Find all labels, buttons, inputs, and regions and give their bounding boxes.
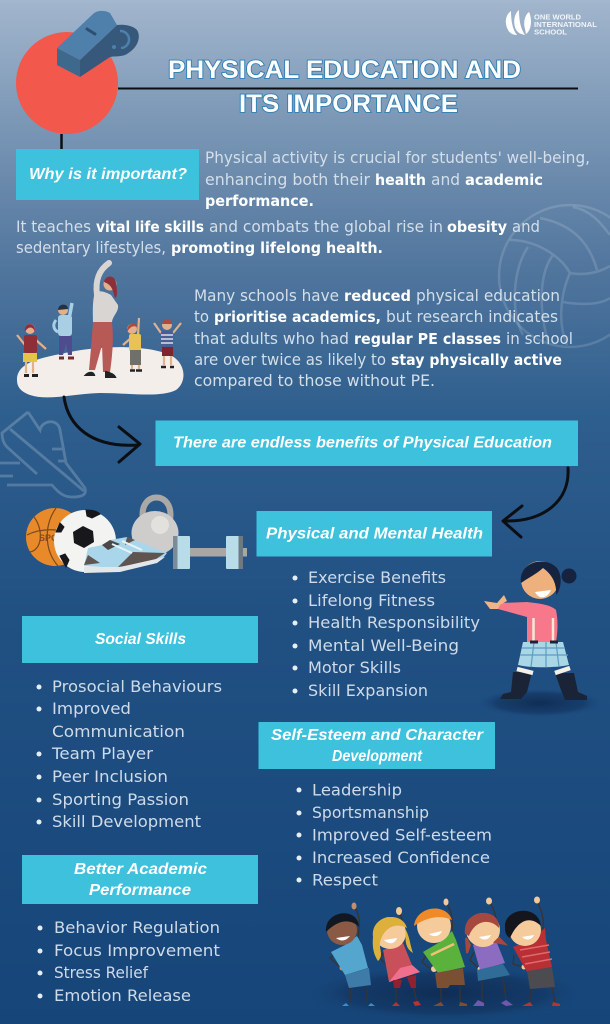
figure: boy — [54, 303, 74, 358]
figure: girl purple — [465, 898, 513, 1006]
text block: reduced physical education: Many schools have — [194, 286, 339, 305]
panel: self-esteem and character development — [258, 722, 495, 890]
text block: reduced physical education: that adults who had — [194, 329, 349, 348]
stem line — [60, 134, 63, 149]
list: Skill Development — [52, 812, 201, 831]
text block: reduced physical education: but research indicates — [386, 307, 558, 326]
list: Increased Confidence — [312, 848, 490, 867]
figure: child blue — [326, 902, 375, 1006]
figure: teacher — [86, 263, 118, 377]
list: Improved Self-esteem — [312, 826, 492, 844]
list: Mental Well-Being — [308, 636, 459, 655]
list: Motor Skills — [308, 658, 401, 677]
logo: ONE WORLD — [534, 12, 582, 22]
text block: intro: and — [512, 217, 540, 236]
heading: Better Academic — [74, 861, 207, 878]
list — [292, 568, 480, 700]
text block: intro: health — [375, 171, 426, 189]
text block: intro: enhancing both their — [205, 170, 370, 189]
list: Improved — [52, 699, 131, 718]
text block: intro: vital life skills — [96, 218, 204, 236]
logo: SCHOOL — [534, 28, 567, 36]
figure: girl yellow — [373, 907, 421, 1006]
text block: reduced physical education: are over twice as likely to — [194, 350, 386, 369]
text block: reduced physical education: regular PE classes — [354, 330, 501, 348]
banner: endless benefits — [156, 420, 578, 466]
text block: reduced physical education: physical education — [416, 286, 560, 305]
list — [36, 677, 222, 831]
figure: boy green — [414, 898, 467, 1006]
icon: soccer ball — [54, 510, 116, 572]
figure: child left — [17, 324, 46, 376]
list: Sporting Passion — [52, 790, 189, 809]
arrow: island to benefits banner — [64, 397, 140, 462]
heading — [258, 722, 495, 769]
callout: why is it important — [16, 149, 199, 200]
list — [296, 780, 492, 890]
heading: Social Skills — [95, 631, 186, 648]
watermark: running shoe — [0, 412, 85, 497]
list: Peer Inclusion — [52, 767, 168, 786]
text block: reduced physical education: reduced — [344, 287, 411, 305]
icon: kettlebell — [132, 498, 178, 555]
list: Stress Relief — [54, 963, 148, 982]
list: Prosocial Behaviours — [52, 677, 222, 696]
text block: intro: It teaches — [16, 217, 91, 236]
text block: intro: obesity — [447, 218, 507, 236]
red circle — [16, 32, 118, 134]
panel: better academic performance — [22, 855, 258, 1005]
heading — [22, 616, 258, 663]
title: ITS IMPORTANCE — [239, 90, 458, 118]
icon: sneaker — [84, 537, 167, 573]
list: Emotion Release — [54, 986, 191, 1005]
banner: endless benefits: There are endless benefits of Physical Education — [173, 434, 552, 452]
watermark: volleyball — [499, 205, 610, 347]
heading: Self-Esteem and Character — [271, 727, 484, 744]
title — [168, 56, 521, 118]
illustration: teacher and children on island — [17, 263, 183, 397]
text block: intro: and combats the global rise in — [209, 217, 443, 236]
title rule — [118, 88, 578, 90]
icon: basketball — [26, 508, 84, 566]
arrow: banner to physical and mental health — [503, 468, 568, 537]
list: Communication — [52, 722, 185, 741]
figure: child yellow — [123, 318, 142, 370]
list: Exercise Benefits — [308, 568, 446, 587]
text block: intro: performance. — [205, 192, 314, 210]
text block: intro: Physical activity is crucial for students' well-being, — [205, 148, 590, 167]
text block: intro: academic — [465, 171, 543, 189]
logo — [506, 10, 597, 36]
figure: boy red — [505, 896, 560, 1006]
text block: reduced physical education: compared to those without PE. — [194, 371, 435, 390]
title: PHYSICAL EDUCATION AND — [168, 56, 521, 84]
list: Lifelong Fitness — [308, 591, 435, 610]
panel: social skills — [22, 616, 258, 831]
text block: reduced physical education — [194, 286, 573, 390]
panel: physical and mental health — [256, 511, 492, 700]
icon: whistle — [57, 11, 139, 77]
illustration: five children stretching — [305, 896, 585, 1021]
icon: basketball: SPO — [39, 533, 58, 543]
text block: intro: sedentary lifestyles, — [16, 238, 166, 257]
text block: reduced physical education: prioritise academics, — [214, 308, 381, 326]
text block: intro — [16, 148, 590, 257]
text block: intro: and — [431, 170, 460, 189]
list: Focus Improvement — [54, 941, 220, 960]
list: Leadership — [312, 780, 402, 800]
callout: why is it important: Why is it important? — [29, 166, 187, 183]
list: Sportsmanship — [312, 803, 429, 822]
heading — [256, 511, 492, 556]
list: Behavior Regulation — [54, 918, 220, 937]
list: Skill Expansion — [308, 681, 428, 700]
heading: Development — [332, 748, 423, 765]
icon: dumbbell — [173, 536, 247, 569]
figure: child striped — [154, 320, 181, 367]
heading — [22, 855, 258, 904]
heading: Physical and Mental Health — [266, 526, 483, 542]
list — [38, 918, 220, 1005]
text block: reduced physical education: stay physically active — [391, 351, 562, 369]
logo: INTERNATIONAL — [534, 20, 597, 29]
list: Team Player — [51, 744, 153, 763]
text block: reduced physical education: in school — [506, 329, 573, 348]
heading: Performance — [89, 882, 191, 899]
text block: reduced physical education: to — [194, 307, 209, 326]
list: Health Responsibility — [308, 613, 480, 632]
illustration: sports equipment — [26, 498, 247, 573]
text block: intro: promoting lifelong health. — [171, 239, 383, 257]
list: Respect — [312, 870, 378, 890]
illustration: girl pointing — [478, 561, 602, 717]
